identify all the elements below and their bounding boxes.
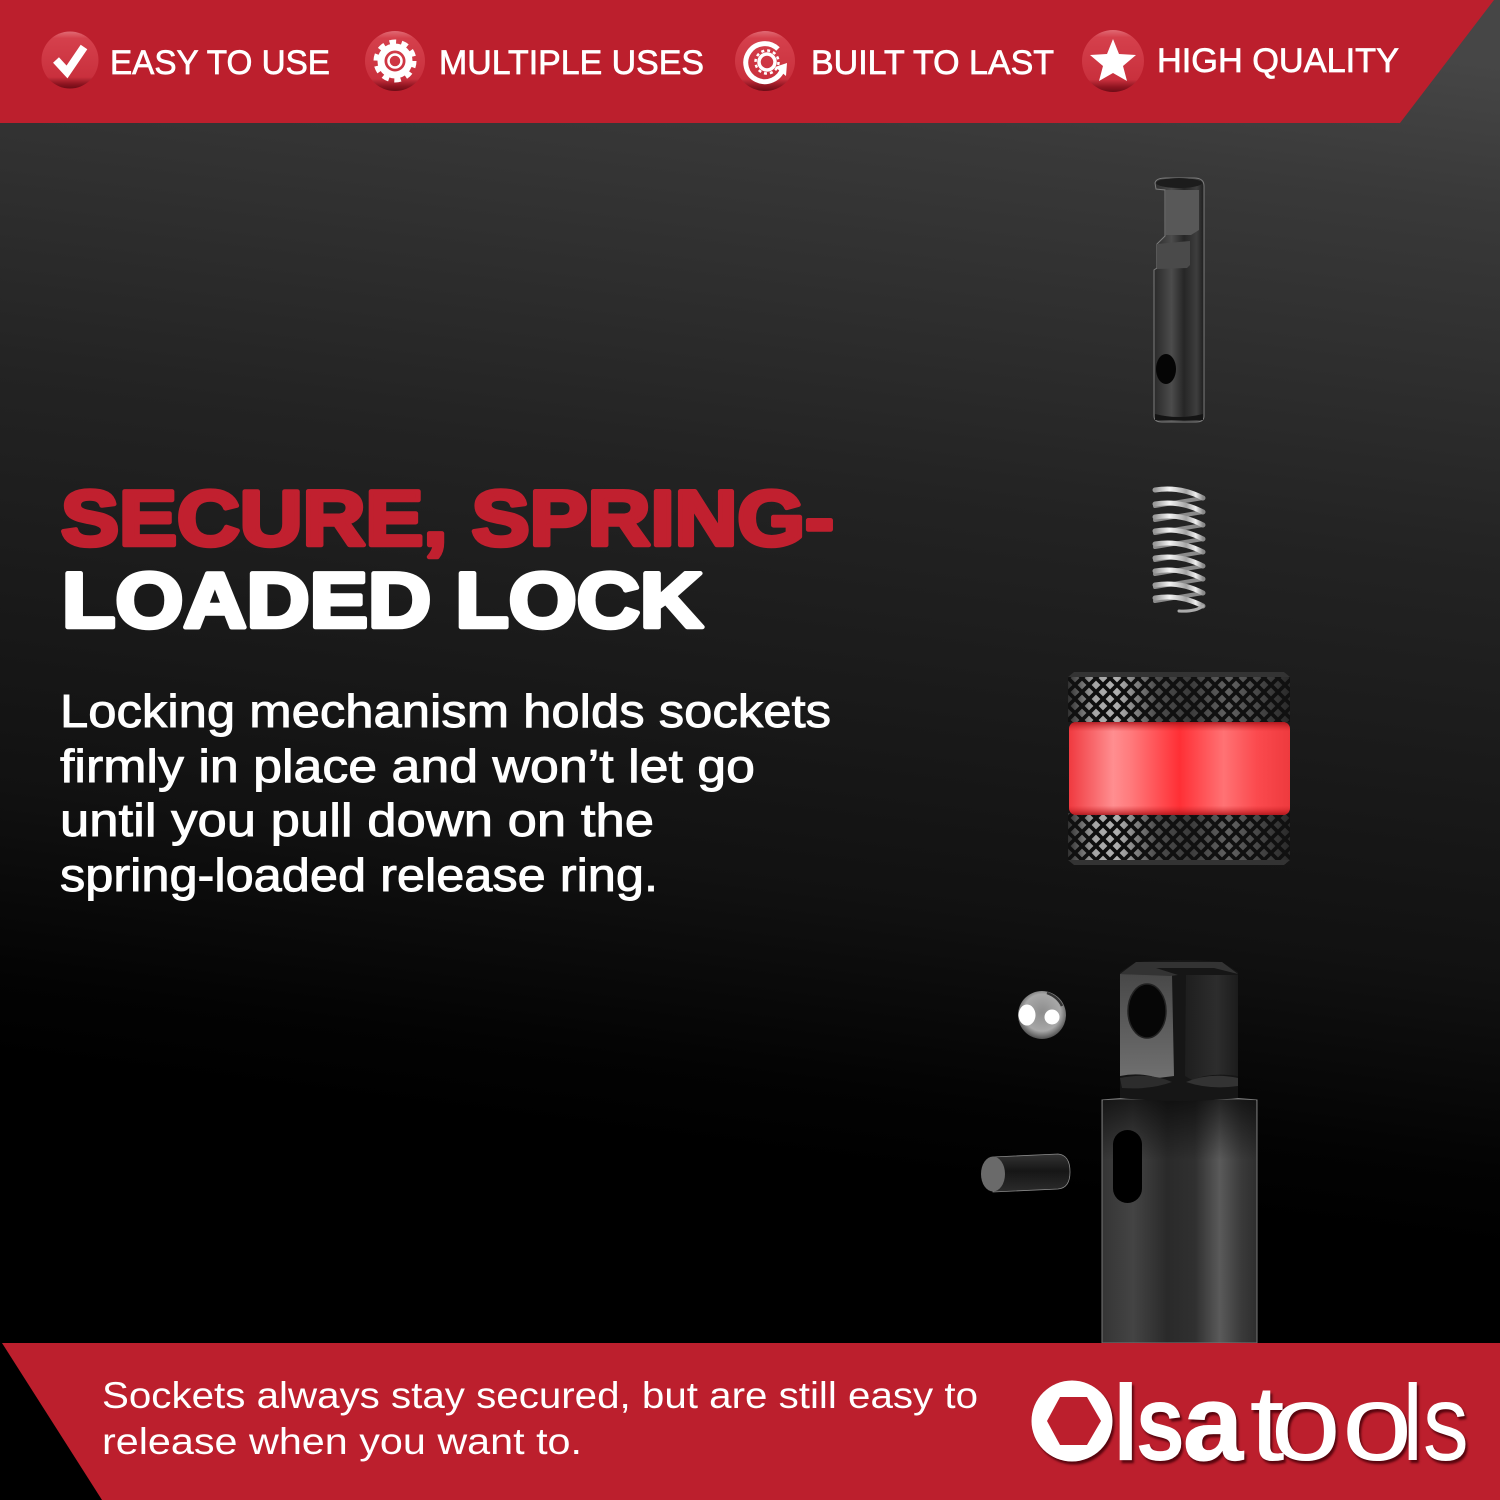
caption: Sockets always stay secured, but are still easy to xyxy=(102,1375,978,1416)
logo: Olsatools: too xyxy=(1250,1363,1412,1483)
logo: Olsatools xyxy=(1032,1362,1469,1484)
badge: built to last xyxy=(735,31,795,91)
body text: Locking mechanism holds sockets xyxy=(60,685,831,737)
heading xyxy=(61,474,834,644)
square head xyxy=(1120,960,1238,1101)
body text: firmly in place and won’t let go xyxy=(60,740,755,792)
shaft xyxy=(1102,1096,1257,1343)
body text: spring-loaded release ring. xyxy=(60,849,658,901)
part: plunger pin xyxy=(1154,178,1204,422)
top banner xyxy=(0,0,1494,123)
logo: Olsatools: a xyxy=(1183,1362,1244,1483)
caption: release when you want to. xyxy=(102,1421,582,1462)
badge: multiple uses xyxy=(365,31,425,91)
label: multiple uses: MULTIPLE USES xyxy=(439,44,704,82)
knurled bottom band xyxy=(1068,813,1290,865)
badge: easy to use xyxy=(42,32,98,88)
part: steel ball xyxy=(1018,991,1066,1039)
part: small pin xyxy=(981,1154,1070,1192)
label: easy to use: EASY TO USE xyxy=(110,44,330,82)
label: built to last: BUILT TO LAST xyxy=(811,44,1054,82)
logo: Olsatools: ls xyxy=(1114,1363,1185,1483)
knurled top band xyxy=(1068,672,1290,722)
body text xyxy=(60,685,831,901)
logo: Olsatools: O xyxy=(1032,1362,1112,1483)
logo: Olsatools: ls xyxy=(1403,1363,1469,1484)
slot xyxy=(1113,1130,1142,1203)
part: release ring xyxy=(1068,672,1290,865)
badge: high quality xyxy=(1082,30,1144,92)
part: socket drive shaft xyxy=(1102,960,1257,1343)
red band xyxy=(1069,722,1290,815)
body text: until you pull down on the xyxy=(60,794,654,846)
heading line: white: LOADED LOCK xyxy=(62,556,703,644)
label: high quality: HIGH QUALITY xyxy=(1157,42,1399,80)
heading line: red: SECURE, SPRING- xyxy=(61,474,834,562)
caption xyxy=(102,1375,978,1462)
bottom banner xyxy=(2,1343,1500,1500)
part: spring xyxy=(1155,489,1203,611)
